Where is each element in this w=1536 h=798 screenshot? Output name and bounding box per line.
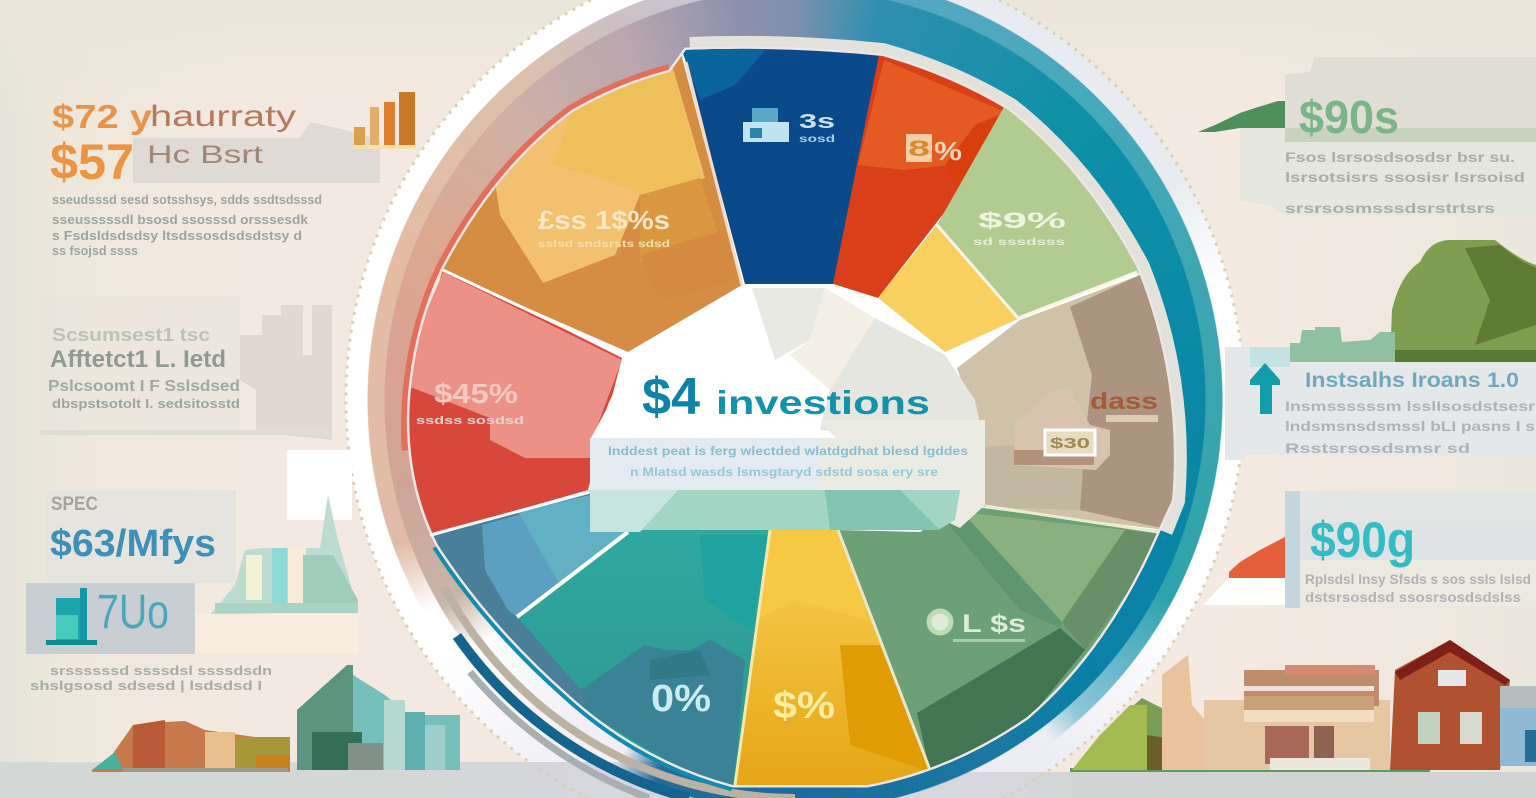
centre lower band <box>590 490 960 530</box>
icon: teal up arrow <box>1250 363 1280 414</box>
heading: Afftetct1 L. Ietd <box>50 346 226 373</box>
outer coloured ring <box>367 0 1223 739</box>
icon: red arrow <box>1229 537 1285 578</box>
wedge label: orange: sslsd sndsrsts sdsd <box>538 239 670 250</box>
centre heading <box>642 368 930 426</box>
panel: lower right <box>1203 491 1536 608</box>
label: Scsumsest1 tsc <box>52 325 210 345</box>
panel: middle right <box>1225 347 1536 460</box>
icon: green houses left <box>297 665 460 770</box>
big number: $57 <box>50 134 134 190</box>
wedge label: beige <box>1014 388 1158 470</box>
pie chart <box>400 40 1190 798</box>
wedge label: navy: sosd <box>799 134 835 145</box>
body text: Fsos lsrsosdsosdsr bsr su. <box>1285 149 1515 165</box>
centre text panel <box>590 438 985 490</box>
centre body text: n Mlatsd wasds lsmsgtaryd sdstd sosa ery sre <box>630 465 938 479</box>
wedge label: green: $9% <box>978 208 1066 233</box>
wedge label: red <box>416 378 524 427</box>
ground strip left <box>0 762 800 798</box>
body text: dstsrsosdsd ssosrsosdsdslss <box>1305 589 1521 605</box>
wedge: yellow <box>878 225 1020 352</box>
wedge label: dark green: L $s <box>962 610 1026 638</box>
panel background <box>40 296 240 430</box>
wedge: bright yellow <box>732 530 934 790</box>
body text <box>1305 571 1531 605</box>
stat number: $90s <box>1299 91 1399 143</box>
body text <box>52 192 322 258</box>
heading: $63/Mfys <box>50 523 216 565</box>
body text: Rsstsrsosdsmsr sd <box>1285 440 1470 456</box>
panel background <box>1285 57 1536 143</box>
body text: srssssssd ssssdsl ssssdsdn <box>50 663 272 678</box>
wedge: orange <box>440 50 742 352</box>
body text: srsrsosmsssdsrstrtsrs <box>1285 200 1495 216</box>
centre body text: Inddest peat is ferg wlectded wlatdgdhat blesd lgddes <box>608 444 968 458</box>
panel background <box>133 122 380 183</box>
panel background <box>1225 347 1536 460</box>
body text: s Fsdsldsdsdsy ltsdssosdsdsdstsy d <box>52 228 302 243</box>
label: SPEC <box>51 494 98 515</box>
white backing <box>1203 578 1285 605</box>
wedge label: orange: £ss 1$%s <box>538 205 670 235</box>
wedge label: red: $45% <box>434 378 518 409</box>
pale band around pie, right side <box>690 49 1174 530</box>
dotted outer circle <box>346 0 1244 798</box>
panel: lower left <box>26 450 358 693</box>
body text <box>1285 149 1525 216</box>
body text: lndsmsnsdsmssl bLI pasns I s <box>1285 418 1535 434</box>
white block behind skyline <box>287 450 352 520</box>
wedge label: red orange <box>906 134 962 166</box>
icon: tree <box>1390 240 1536 362</box>
wedge label: red: ssdss sosdsd <box>416 415 524 427</box>
wedge label: dark green <box>929 610 1026 642</box>
ground line right <box>1070 768 1430 772</box>
body text <box>1285 398 1536 456</box>
panel: middle left <box>40 296 332 440</box>
wedge: navy blue <box>680 40 890 284</box>
wedge label: red orange: 8 <box>908 136 930 161</box>
pie outline <box>409 49 1174 785</box>
icon: green arrow <box>1198 101 1285 132</box>
icon: blue house <box>1500 686 1536 766</box>
body text: Rplsdsl Insy Sfsds s sos ssls lslsd <box>1305 571 1531 587</box>
inner coloured ring <box>384 0 1206 798</box>
green hills <box>1290 327 1395 362</box>
icon: green hill <box>1072 698 1210 770</box>
blue stripes around pie, lower left <box>438 545 795 798</box>
wedge label: yellow: $% <box>773 685 835 727</box>
panel: top left: haurraty <box>150 100 296 133</box>
wedge label: beige: $30 <box>1050 435 1090 452</box>
icon: bar chart <box>354 92 416 149</box>
wedge: beige <box>957 275 1190 532</box>
wedge label: green <box>973 208 1066 248</box>
body text: ss fsojsd ssss <box>52 243 138 258</box>
wedge separators <box>430 62 1158 785</box>
centre heading: investions <box>716 384 930 421</box>
wedge label: navy <box>743 108 835 145</box>
body text: lsrsotsisrs ssosisr lsrsoisd <box>1285 169 1525 185</box>
accent bar <box>1285 491 1300 608</box>
panel: top left <box>50 92 416 258</box>
body text: Pslcsoomt I F Sslsdsed <box>48 378 240 395</box>
cream block <box>195 614 358 654</box>
centre heading: $4 <box>642 368 700 426</box>
outer white ring <box>346 0 1242 772</box>
icon: beige house <box>1162 655 1390 770</box>
wedge: teal <box>517 530 770 798</box>
skyline <box>210 495 358 615</box>
wedge: red <box>400 268 622 535</box>
sub label: Hc Bsrt <box>147 141 263 169</box>
stat box <box>26 583 195 654</box>
wedge label: navy: 3s <box>799 111 835 133</box>
centre disc <box>590 284 985 532</box>
panel background <box>1300 491 1536 607</box>
body text <box>30 663 272 693</box>
body text: shslgsosd sdsesd | lsdsdsd I <box>30 678 262 693</box>
salmon band around pie, left side <box>409 72 670 450</box>
wedge: dark green <box>840 508 1158 770</box>
panel: top right <box>1198 57 1536 216</box>
stat number: 7Uo <box>97 586 169 639</box>
icon: red houses left <box>92 720 290 772</box>
wedge: light green <box>937 108 1138 316</box>
wedge label: teal: 0% <box>651 678 711 720</box>
heading: Instsalhs Iroans 1.0 <box>1305 369 1519 392</box>
skyline <box>240 305 332 440</box>
wedge label: red orange: % <box>934 136 962 166</box>
stat number: $90g <box>1310 512 1415 568</box>
wedge: blue <box>434 490 624 706</box>
wedge label: orange <box>538 205 670 250</box>
icon: teal building <box>46 588 97 645</box>
body text: sseudsssd sesd sotsshsys, sdds ssdtsdsssd <box>52 192 322 207</box>
body text: sseusssssdl bsosd ssosssd orsssesdk <box>52 212 309 227</box>
heading: $72 y <box>52 98 153 135</box>
body text: Insmssssssm lsslIsosdstsesr <box>1285 398 1536 414</box>
centre body text <box>608 444 968 479</box>
panel background <box>46 490 236 583</box>
ground strip right <box>800 772 1536 798</box>
panel: middle left: dbspstsotolt I. sedsitosstd <box>52 396 240 411</box>
wedge label: beige: dass <box>1090 388 1158 414</box>
icon: red house <box>1390 640 1510 770</box>
wedge: red orange <box>833 56 1018 298</box>
wedge label: green: sd sssdsss <box>973 237 1066 248</box>
